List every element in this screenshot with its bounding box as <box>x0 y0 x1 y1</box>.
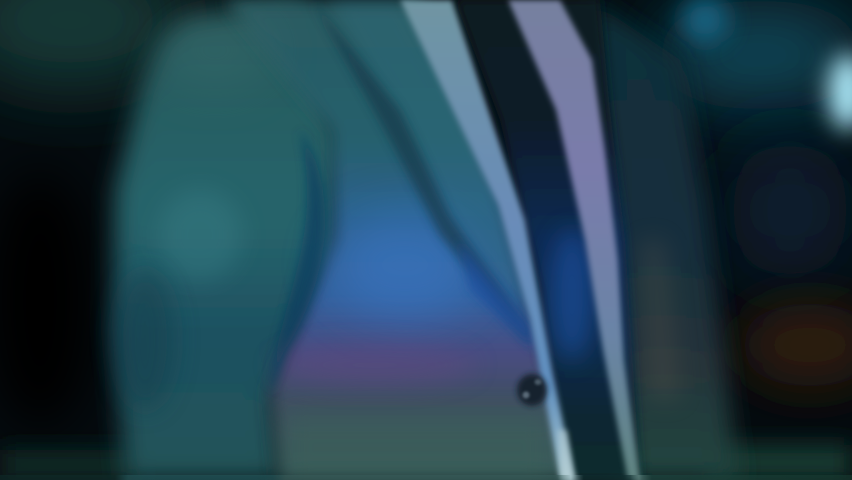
purple band <box>275 345 475 385</box>
bokeh highlight: top right <box>681 0 729 44</box>
shirt highlight: lower left strip <box>558 430 575 480</box>
shoulder highlight <box>155 10 275 90</box>
lapel blue shadow <box>458 240 535 350</box>
sleeve highlight <box>158 190 242 280</box>
bottom edge tone <box>0 475 852 480</box>
chest blue glow <box>330 213 480 317</box>
lapel fold shadow <box>312 0 532 342</box>
shirt: right collar strip <box>508 0 640 480</box>
backdrop glow: right dark blue <box>730 140 850 280</box>
sleeve: left arm <box>112 0 340 480</box>
sleeve lower-left shadow <box>115 270 175 410</box>
backdrop glow: bottom-left green <box>0 450 140 480</box>
jacket: right side <box>590 0 738 480</box>
jacket button <box>517 374 547 406</box>
backdrop glow: left black falloff <box>0 170 95 430</box>
jacket: front panel <box>225 0 572 480</box>
lower jacket green tone <box>285 415 550 480</box>
lapel <box>330 0 535 320</box>
arm gap shadow <box>270 130 325 395</box>
backdrop glow: bottom-right green <box>710 445 852 480</box>
shirt: left collar strip <box>400 0 575 480</box>
tie blue glow <box>550 230 594 360</box>
right jacket reflection <box>640 240 680 400</box>
backdrop glow: right brown <box>740 303 852 387</box>
bokeh highlight: right edge <box>828 54 852 130</box>
backdrop glow: top-left teal <box>0 0 190 90</box>
tie and placket <box>455 0 640 480</box>
backdrop glow: top-right blue <box>650 0 852 110</box>
